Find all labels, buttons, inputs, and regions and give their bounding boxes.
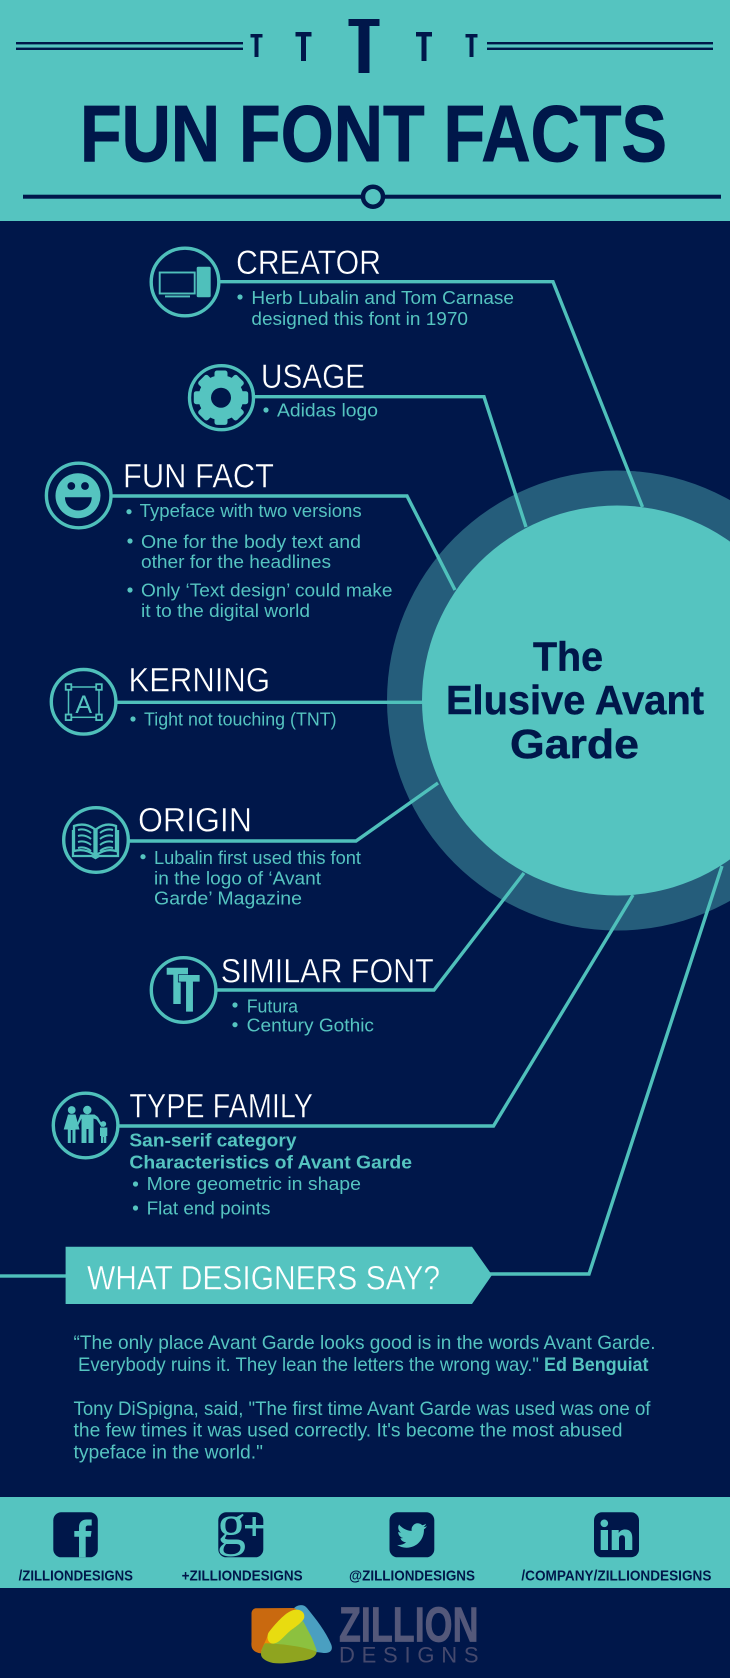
body text [232,996,374,1036]
body text: Century Gothic [247,1016,374,1036]
heading: ORIGIN [138,802,252,840]
body text: Flat end points [147,1199,270,1219]
panel: fun fact [46,458,455,621]
icon: computer [151,248,219,316]
heading: FUN FACT [123,458,274,496]
icon: text frame [51,670,116,734]
icon: twitter [390,1512,434,1557]
icon: open book [64,808,128,872]
quote: Tony DiSpigna: the few times it was used correctly. It's become the most abused [74,1420,622,1442]
heading: CREATOR [236,244,381,282]
quote: Tony DiSpigna: Tony DiSpigna, said, "The first time Avant Garde was used was one of [74,1398,651,1420]
circle title: The [533,634,603,680]
icon: facebook [53,1512,98,1557]
body text: Adidas logo [277,401,378,421]
heading: KERNING [128,662,270,700]
connector [128,783,438,841]
quote: Tony DiSpigna [74,1398,651,1464]
heading: TYPE FAMILY [129,1088,313,1126]
quote: Tony DiSpigna: typeface in the world." [74,1442,263,1464]
social handles [19,1568,711,1585]
body text: in the logo of ‘Avant [154,868,321,888]
heading: USAGE [261,358,365,396]
central circle [422,506,730,896]
body text [129,1131,412,1219]
body text [126,501,393,621]
quote: Ed Benguiat [74,1332,656,1376]
body text: Herb Lubalin and Tom Carnase [251,288,514,308]
quote: Ed Benguiat: Ed Benguiat [544,1354,649,1376]
icon: smiley [46,463,111,528]
panel: similar font [151,873,524,1036]
panel: usage [190,358,526,527]
connector [219,282,642,507]
panel: origin [64,783,438,909]
wordmark: ZILLION [339,1599,478,1653]
panel: type family [53,895,633,1219]
body text: Lubalin first used this font [154,848,361,868]
icon: family [53,1093,118,1158]
panel: creator [151,244,642,507]
body text [140,848,361,909]
connector [110,496,455,590]
quote: Ed Benguiat: “The only place Avant Garde looks good is in the words Avant Garde. [74,1332,656,1354]
social handles: /ZILLIONDESIGNS [19,1568,133,1585]
banner: what designers say [0,1247,492,1304]
circle title [446,634,704,767]
connector [116,701,424,704]
social handles: @ZILLIONDESIGNS [349,1568,475,1585]
circle title: Garde [510,721,639,767]
header band [0,0,730,221]
quote: Ed Benguiat: Everybody ruins it. They lean the letters the wrong way." [78,1354,539,1376]
connector: designers to circle [490,866,722,1274]
social handles: /COMPANY/ZILLIONDESIGNS [521,1568,711,1585]
body text: San-serif category [129,1131,296,1151]
icon: text frame: A [75,691,92,719]
logo mark [251,1605,332,1663]
quotes [74,1332,656,1464]
connector [253,397,526,527]
body text: designed this font in 1970 [251,309,468,329]
heading: SIMILAR FONT [221,953,434,991]
body text: Futura [247,996,299,1016]
circle title: Elusive Avant [446,677,704,723]
logo: zillion designs [251,1599,478,1668]
body text: other for the headlines [141,552,331,572]
icon: google plus: g [217,1492,246,1557]
connector [117,895,633,1126]
body text: One for the body text and [141,532,361,552]
connector [215,873,524,990]
outer ring [387,470,730,930]
body text: it to the digital world [141,601,310,621]
body text: Typeface with two versions [140,501,362,521]
icon: linkedin [594,1512,639,1557]
body text: Only ‘Text design’ could make [141,581,392,601]
panel: kerning [51,662,424,734]
social handles: +ZILLIONDESIGNS [182,1568,303,1585]
social band [0,1492,730,1588]
icon: two Ts [151,958,216,1022]
body text [237,288,514,329]
header rule with ring [23,187,721,207]
icon: gear [190,366,254,430]
body text: Garde’ Magazine [154,889,302,909]
body text: Tight not touching (TNT) [144,710,337,730]
banner: what designers say: WHAT DESIGNERS SAY? [87,1260,440,1298]
decorative T row [16,19,713,73]
body text: More geometric in shape [147,1174,361,1194]
body text: Characteristics of Avant Garde [129,1152,412,1172]
logo: zillion designs: DESIGNS [339,1643,478,1668]
icon: google plus [217,1492,264,1557]
